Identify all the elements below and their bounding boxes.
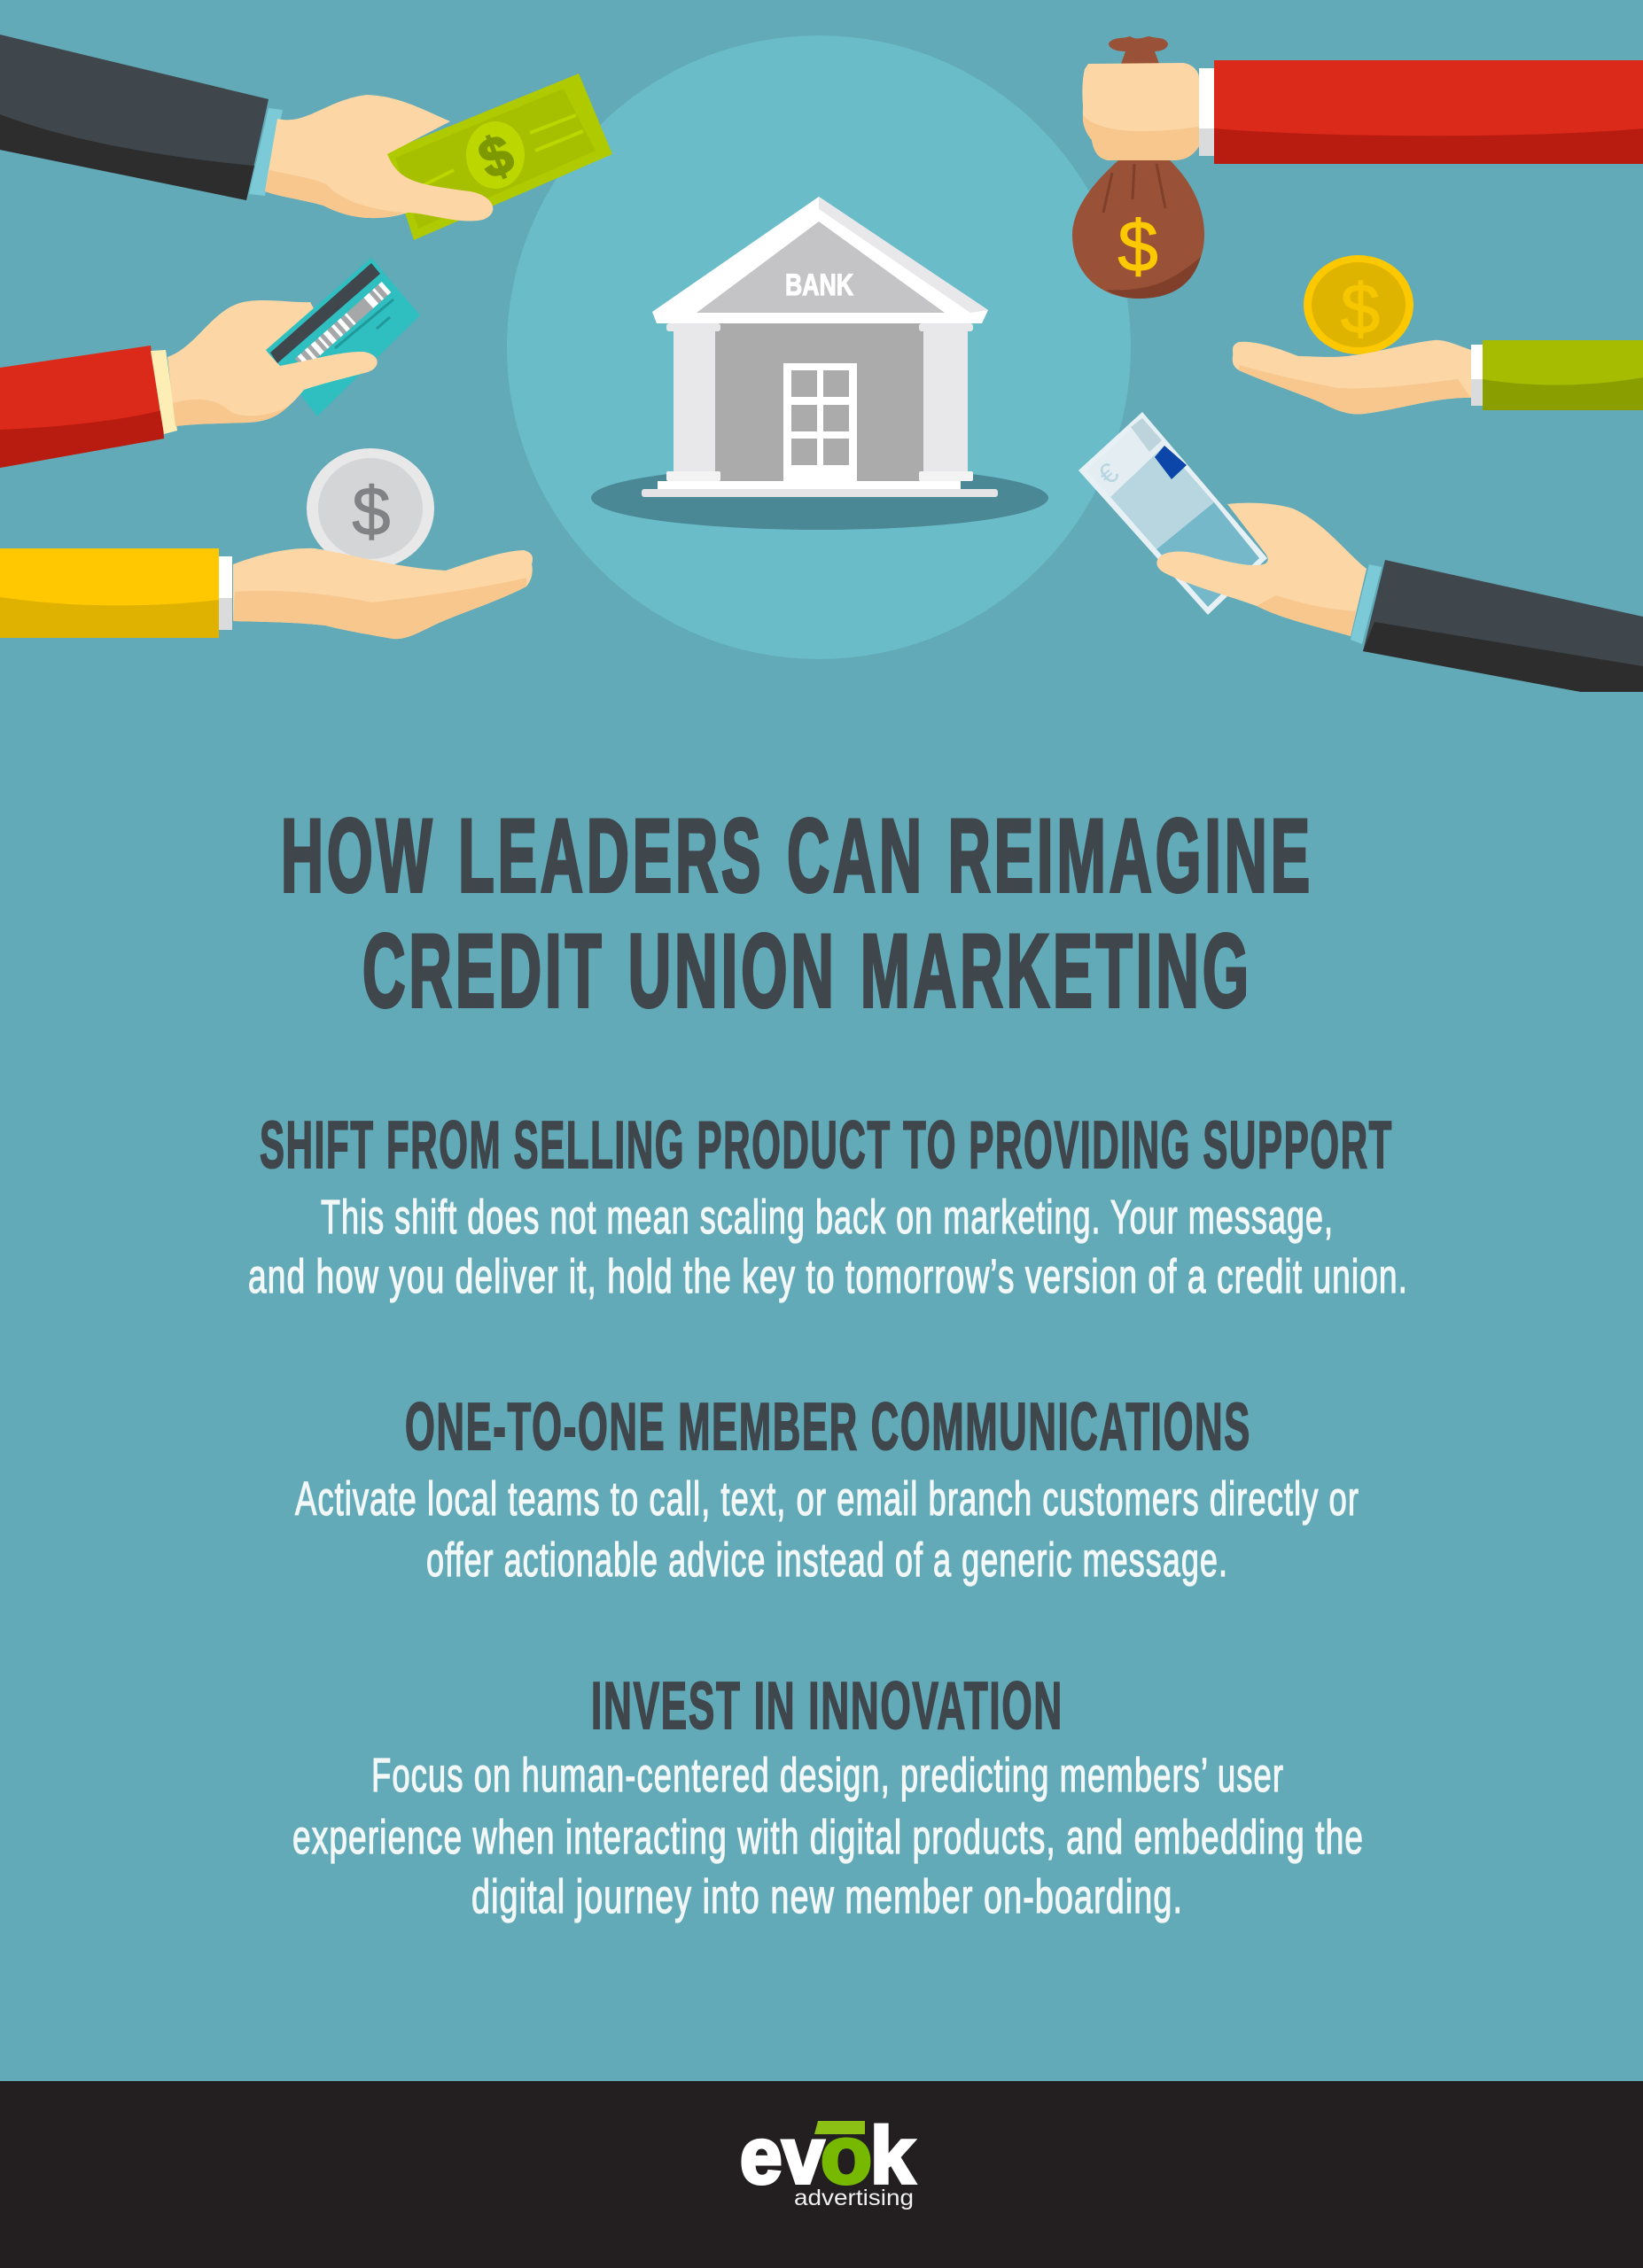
yellow sleeve (0, 548, 219, 638)
hand shadow (233, 578, 526, 639)
cuff (151, 350, 177, 434)
fist (1082, 63, 1199, 160)
section text (295, 1472, 1359, 1587)
logo: evok advertising (740, 2110, 915, 2210)
circle backdrop behind bank (507, 35, 1131, 659)
section text (292, 1749, 1364, 1923)
bank wall (715, 323, 923, 481)
hand top left: dark suit with green banknote (0, 35, 612, 240)
back of hand behind card (167, 300, 330, 390)
section: one-to-one member communications (295, 1389, 1359, 1587)
hand shadow (173, 400, 289, 426)
silver coin (307, 448, 434, 569)
green banknote: $ (471, 123, 522, 191)
cuff (219, 556, 232, 630)
hand shadow (265, 170, 404, 218)
icon: bank building (591, 197, 1048, 530)
red sleeve (1214, 60, 1643, 164)
green sleeve (1483, 340, 1643, 410)
hand top right: red sleeve holding money bag (1072, 36, 1643, 299)
section: shift from selling product (248, 1107, 1408, 1303)
bank steps (642, 481, 998, 497)
palm and thumb in front of card (167, 351, 378, 426)
open hand (1233, 340, 1471, 414)
hand (1156, 503, 1367, 636)
red sleeve (0, 346, 164, 468)
euro banknote (1078, 412, 1267, 615)
left column (666, 323, 720, 481)
money bag (1072, 36, 1204, 299)
bank entablature (657, 314, 982, 323)
section text: offer actionable advice instead of a generic message. (426, 1534, 1228, 1587)
cuff (1351, 564, 1382, 644)
bank door (783, 363, 857, 489)
euro banknote: € (1092, 456, 1125, 491)
right column (919, 323, 973, 481)
section text (248, 1191, 1408, 1303)
dark sleeve (1363, 560, 1643, 692)
logo: evok advertising: o (821, 2110, 872, 2201)
logo: evok advertising: ev (740, 2112, 824, 2201)
hand (265, 95, 493, 221)
open hand (233, 548, 533, 639)
section: invest in innovation (292, 1668, 1364, 1923)
hand bottom right: dark suit with euro banknote (1078, 412, 1643, 692)
gold coin (1304, 255, 1413, 354)
logo: evok advertising: k (870, 2112, 915, 2201)
logo: evok advertising: advertising (794, 2186, 914, 2210)
hand right: green sleeve with gold coin (1233, 255, 1643, 414)
hand bottom left: yellow sleeve with silver coin (0, 448, 533, 639)
money bag: $ (1117, 206, 1158, 287)
cuff (1471, 345, 1483, 406)
green banknote (385, 74, 612, 240)
silver coin: $ (352, 472, 391, 550)
title (281, 797, 1313, 1029)
bank sign: BANK (785, 268, 853, 302)
hand shadow (1257, 595, 1356, 636)
footer bar (0, 2081, 1643, 2268)
bank roof (652, 197, 988, 323)
bank ground shadow (591, 466, 1048, 530)
fist shadow (1083, 115, 1199, 160)
section text: digital journey into new member on-boarding. (471, 1870, 1183, 1923)
cuff (249, 108, 283, 196)
hand left: red sleeve with teal credit card (0, 258, 420, 468)
hand shadow (1239, 365, 1471, 414)
section heading: INVEST IN INNOVATION (591, 1668, 1063, 1743)
cuff (1199, 68, 1214, 156)
credit card (266, 258, 420, 416)
dark sleeve (0, 35, 269, 200)
gold coin: $ (1341, 269, 1380, 348)
